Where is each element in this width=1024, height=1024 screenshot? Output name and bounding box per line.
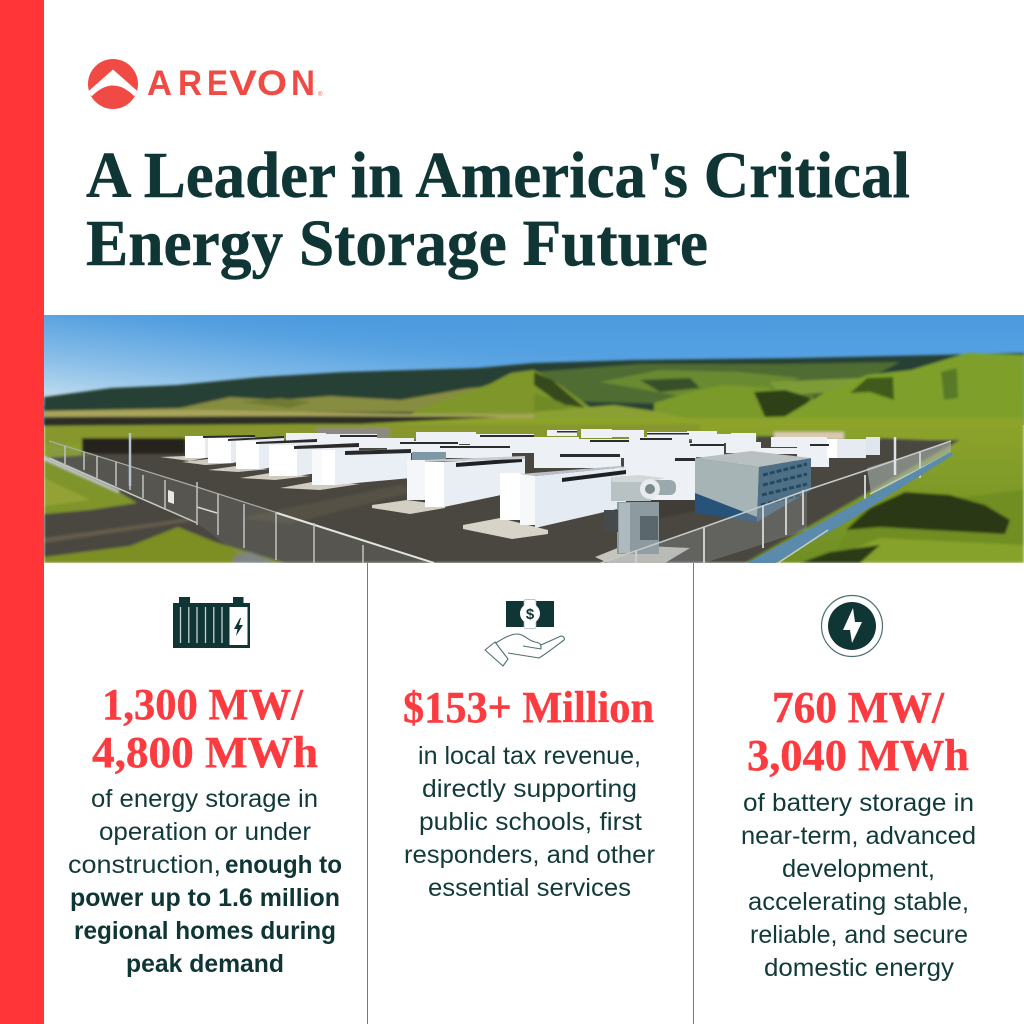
description: reliable, and secure — [750, 921, 968, 949]
column 3: advanced development — [741, 596, 976, 982]
red side bar — [0, 0, 44, 1024]
stat: 760 MW / 3,040 MWh: 3,040 MWh — [747, 731, 969, 780]
column 2: tax revenue — [403, 600, 655, 902]
title: Energy Storage Future — [86, 207, 708, 280]
logo: Arevon: ® — [318, 91, 323, 98]
description: accelerating stable, — [748, 888, 969, 916]
back rows of containers — [286, 429, 880, 500]
right large hill — [784, 353, 1024, 425]
chain-link fences — [49, 433, 953, 563]
description: operation or under — [99, 818, 311, 846]
icon: hand holding money — [485, 600, 564, 666]
road streak — [44, 518, 192, 543]
grey switchgear building — [695, 451, 811, 522]
left grass — [44, 460, 137, 514]
description: directly supporting — [422, 775, 637, 803]
description — [404, 742, 655, 902]
bright hill centre-left — [410, 370, 600, 414]
description: responders, and other — [404, 841, 655, 869]
front rows of containers — [160, 435, 626, 539]
mottled distant hills — [534, 362, 900, 405]
description: construction, — [68, 851, 221, 879]
description: essential services — [428, 874, 631, 902]
description — [68, 785, 342, 978]
description: public schools, first — [419, 808, 642, 836]
description: of battery storage in — [743, 789, 974, 817]
transformer — [595, 475, 690, 563]
title — [86, 139, 910, 280]
grassland — [44, 418, 1024, 563]
description: development, — [782, 855, 935, 883]
right grass patches — [858, 490, 1024, 526]
logo: Arevon: R — [178, 64, 202, 103]
icon: hand holding money: $ — [526, 606, 535, 623]
tan foothills left — [61, 386, 480, 414]
icon: battery — [173, 597, 250, 648]
far ridge — [44, 351, 1024, 416]
description: enough to — [225, 851, 342, 879]
dark back fence — [82, 438, 185, 454]
logo: Arevon: O — [257, 64, 287, 103]
mid mound — [654, 385, 814, 418]
stat: 760 MW / 3,040 MWh — [747, 683, 969, 780]
description — [741, 789, 976, 982]
gravel pad — [44, 440, 960, 563]
column dividers — [367, 563, 694, 1024]
description: domestic energy — [764, 954, 955, 982]
title: A Leader in America's Critical — [86, 139, 910, 212]
description: near-term, advanced — [741, 822, 976, 850]
logo: Arevon: A — [147, 64, 172, 103]
stat: $153+ Million: $153+ Million — [403, 683, 654, 732]
stat: 1,300 MW / 4,800 MWh — [92, 680, 318, 777]
column 1: operating storage — [68, 597, 342, 978]
tree shadow on grass — [846, 492, 1010, 534]
stat: 1,300 MW / 4,800 MWh: 4,800 MWh — [92, 728, 318, 777]
logo: Arevon: V — [229, 64, 258, 103]
photo: battery storage site in green hills — [44, 315, 1024, 563]
description: of energy storage in — [91, 785, 318, 813]
big container centre — [500, 473, 520, 520]
pads — [372, 500, 445, 514]
big container left — [407, 460, 425, 500]
description: power up to 1.6 million — [70, 884, 340, 912]
icon: lightning bolt in circle — [822, 596, 882, 656]
bottom left grass — [44, 527, 285, 563]
valley band — [44, 410, 600, 418]
logo: Arevon: N — [291, 64, 315, 103]
description: in local tax revenue, — [418, 742, 641, 770]
description: regional homes during — [74, 917, 336, 945]
description: peak demand — [126, 950, 284, 978]
stat: 1,300 MW / 4,800 MWh: 1,300 MW/ — [102, 680, 304, 729]
left curb — [44, 456, 119, 493]
logo: Arevon — [87, 59, 323, 109]
logo: Arevon: E — [207, 64, 228, 103]
stat: 760 MW / 3,040 MWh: 760 MW/ — [772, 683, 945, 732]
